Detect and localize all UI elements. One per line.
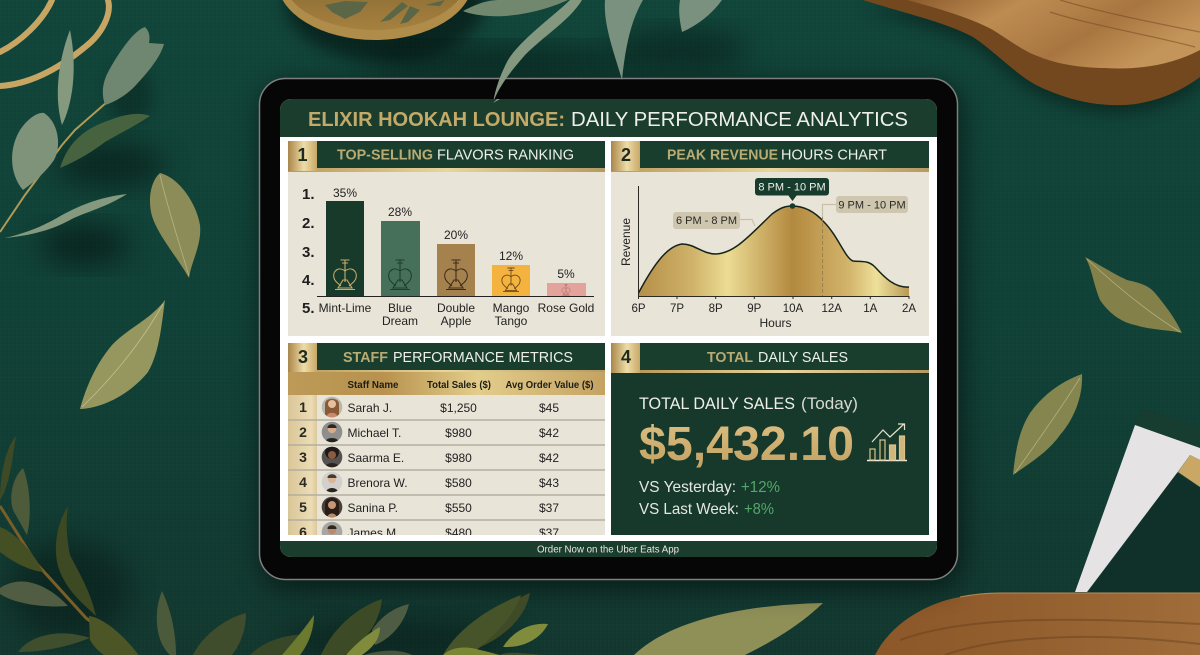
- footer bar: [280, 541, 937, 557]
- row 5: $37: [539, 501, 559, 515]
- bar: Rose Gold: 5%: [557, 267, 575, 281]
- row 2: 2: [299, 424, 307, 440]
- callout: 8 PM - 10 PM: [755, 178, 829, 209]
- bar: Mint-Lime: Mint-Lime: [319, 301, 372, 315]
- bar chart: [317, 186, 594, 328]
- panel 2 header: HOURS CHART: [781, 148, 887, 164]
- gold rings top left: [0, 0, 109, 86]
- bar: Blue Dream: Dream: [382, 314, 418, 328]
- axis labels: 8P: [709, 303, 723, 315]
- table header: Avg Order Value ($): [506, 379, 594, 391]
- avatar 5: [321, 496, 343, 518]
- bottom left branch: [0, 436, 246, 655]
- avatar 3: [322, 446, 342, 468]
- rank numbers: 1.: [302, 186, 315, 203]
- sales heading: TOTAL DAILY SALES: [639, 395, 795, 413]
- panel 4 header: [611, 343, 929, 373]
- row 6 (clipped): $480: [445, 526, 472, 540]
- panel 3 header: PERFORMANCE METRICS: [393, 350, 573, 366]
- avatar 2: [322, 422, 342, 442]
- comparison figures: [639, 479, 780, 518]
- footer bar: Order Now on the Uber Eats App: [537, 544, 679, 556]
- rank numbers: 4.: [302, 272, 315, 289]
- axis labels: 12A: [821, 303, 842, 315]
- bar: Mango Tango: Tango: [495, 314, 528, 328]
- panel 4 header: TOTAL: [707, 350, 753, 366]
- row 5: 5: [299, 499, 307, 515]
- wooden board bottom right: [875, 593, 1200, 655]
- comparison figures: VS Last Week:: [639, 501, 739, 518]
- row 3: $980: [445, 451, 472, 465]
- rank numbers: 2.: [302, 215, 315, 232]
- bar: Mint-Lime: [319, 186, 372, 315]
- panel 2 header: PEAK REVENUE: [667, 148, 778, 164]
- bar: Mint-Lime: 35%: [333, 186, 357, 200]
- avatar 6: [322, 522, 342, 535]
- table header: [288, 372, 605, 395]
- bar: Mango Tango: Mango: [493, 301, 530, 315]
- wooden board top right: [863, 0, 1200, 113]
- row 1: $1,250: [440, 401, 477, 415]
- avatar 4: [322, 472, 342, 492]
- bottom center branch: [250, 593, 548, 655]
- row 2: Michael T.: [348, 426, 401, 440]
- gold plate with herbs: [277, 0, 485, 62]
- panel 1: top-selling flavors: [288, 141, 605, 336]
- bar: Mango Tango: [492, 249, 530, 328]
- panel 1 header: FLAVORS RANKING: [437, 148, 574, 164]
- row 3: 3: [299, 449, 307, 465]
- row 2: [299, 421, 559, 444]
- screen: [280, 99, 937, 557]
- axis labels: 7P: [670, 303, 684, 315]
- axis labels: 6P: [631, 303, 646, 315]
- bar: Double Apple: Double: [437, 301, 475, 315]
- panel 3: staff performance: [288, 343, 605, 543]
- row 5: Sanina P.: [348, 501, 398, 515]
- bar: Double Apple: Apple: [441, 314, 472, 328]
- row 1: [299, 396, 559, 418]
- row 4: $43: [539, 476, 559, 490]
- row 3: $42: [539, 451, 559, 465]
- axis labels: 9P: [747, 303, 762, 315]
- row 1: Sarah J.: [348, 401, 392, 415]
- table header: Staff Name: [348, 379, 399, 391]
- icon: growth chart: [867, 424, 907, 460]
- callout: 6 PM - 8 PM: 6 PM - 8 PM: [676, 215, 737, 227]
- sales value: $5,432.10: [639, 418, 854, 471]
- branch top left: [0, 27, 164, 238]
- bar: Double Apple: [437, 228, 475, 328]
- panel 4 header: 4: [621, 347, 631, 367]
- comparison figures: VS Yesterday:: [639, 479, 736, 496]
- rank numbers: 5.: [302, 300, 315, 317]
- row 2: $980: [445, 426, 472, 440]
- row 3: Saarma E.: [348, 451, 404, 465]
- panel 3 header: [288, 343, 605, 373]
- axis labels: 2A: [902, 303, 916, 315]
- bar: Rose Gold: Rose Gold: [538, 301, 594, 315]
- panel 1 header: TOP-SELLING: [337, 148, 433, 164]
- panel 2: peak revenue hours: [611, 141, 929, 336]
- rank numbers: 3.: [302, 244, 315, 261]
- row 4: [299, 471, 559, 494]
- bar: Blue Dream: Blue: [388, 301, 412, 315]
- row 1: $45: [539, 401, 559, 415]
- panel 1 header: [288, 141, 605, 172]
- row 6 (clipped): James M.: [348, 526, 400, 540]
- panel 3 header: 3: [298, 347, 308, 367]
- bottom leaf: [634, 603, 823, 655]
- row 2: $42: [539, 426, 559, 440]
- row 4: Brenora W.: [348, 476, 408, 490]
- bar: Double Apple: 20%: [444, 228, 468, 242]
- revenue area: [638, 206, 909, 296]
- staff table: [288, 372, 605, 543]
- stacked cards right: [1075, 408, 1200, 592]
- row 5: [299, 496, 559, 518]
- sales heading: (Today): [801, 395, 858, 413]
- panel 4: total daily sales: [611, 343, 929, 535]
- panel 1 header: 1: [297, 145, 308, 165]
- loose leaf 1: [150, 173, 200, 278]
- loose leaf 3: [1085, 257, 1182, 333]
- title bar: DAILY PERFORMANCE ANALYTICS: [571, 109, 908, 131]
- panel 2 header: 2: [621, 145, 631, 165]
- row 4: $580: [445, 476, 472, 490]
- row 5: $550: [445, 501, 472, 515]
- tablet: [260, 78, 962, 588]
- comparison figures: +12%: [741, 479, 780, 496]
- leaf tip over title: [493, 99, 500, 103]
- bar: Blue Dream: 28%: [388, 205, 412, 219]
- area chart: [619, 178, 916, 330]
- bar: Mango Tango: 12%: [499, 249, 523, 263]
- callout: 9 PM - 10 PM: [822, 196, 908, 217]
- callout: 6 PM - 8 PM: [673, 212, 755, 229]
- axis labels: 1A: [863, 303, 878, 315]
- comparison figures: +8%: [744, 501, 774, 518]
- axes: [638, 186, 909, 296]
- title bar: ELIXIR HOOKAH LOUNGE:: [308, 109, 565, 131]
- loose leaf 2: [80, 300, 165, 409]
- callout: 9 PM - 10 PM: 9 PM - 10 PM: [838, 200, 906, 212]
- x axis title: Hours: [759, 316, 792, 330]
- callout: 8 PM - 10 PM: 8 PM - 10 PM: [758, 182, 826, 194]
- y axis title: Revenue: [619, 218, 633, 266]
- bar: Rose Gold: [538, 267, 594, 315]
- bar: Blue Dream: [381, 205, 420, 328]
- row 6 (clipped): [300, 522, 558, 535]
- table header: Total Sales ($): [427, 379, 491, 391]
- loose leaf 4: [1013, 374, 1082, 475]
- title bar: [280, 99, 937, 137]
- row 3: [300, 446, 558, 468]
- row 4: 4: [299, 474, 307, 490]
- panel 3 header: STAFF: [343, 350, 388, 366]
- row 6 (clipped): 6: [299, 524, 307, 540]
- panel 2 header: [611, 141, 929, 172]
- avatar 1: [321, 396, 343, 418]
- panel 4 header: DAILY SALES: [758, 350, 848, 366]
- axis labels: [631, 303, 916, 315]
- row 1: 1: [299, 399, 307, 415]
- rank numbers: [302, 186, 315, 317]
- top leaves overlapping the tablet: [463, 0, 722, 103]
- row 6 (clipped): $37: [539, 526, 559, 540]
- axis labels: 10A: [783, 303, 804, 315]
